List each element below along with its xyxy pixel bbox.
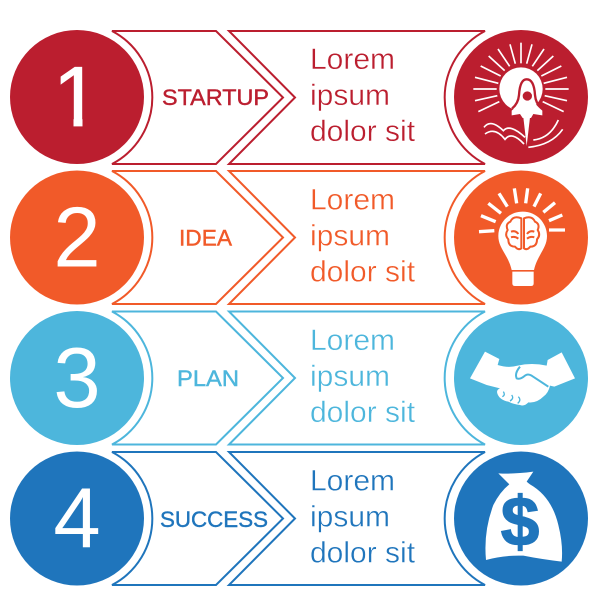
label: success: SUCCESS (160, 507, 268, 532)
number circle 1: 1 (53, 50, 100, 145)
number circle 3 (10, 311, 144, 445)
arrow: text panel 3 (229, 312, 485, 444)
arrow: label chevron 4 (112, 452, 283, 585)
arrow: text panel 2 (229, 171, 485, 304)
icon: rocket (473, 43, 569, 147)
icon circle 2 (454, 170, 588, 304)
icon circle 4 (454, 452, 588, 586)
text block 2: Lorem (310, 184, 395, 216)
arrow: text panel 4 (229, 452, 485, 585)
number circle 1 (10, 30, 144, 164)
text block 2 (310, 184, 416, 288)
row 4: success (10, 452, 588, 586)
text block 1: ipsum (310, 79, 390, 112)
label: plan: PLAN (177, 366, 239, 391)
number circle 3: 3 (53, 331, 101, 426)
label: startup: STARTUP (162, 85, 269, 110)
label: idea: IDEA (179, 226, 232, 250)
icon circle 3 (454, 311, 588, 445)
number circle 2: 2 (53, 190, 101, 286)
text block 3: Lorem (310, 324, 395, 357)
arrow: label chevron 3 (112, 312, 283, 444)
text block 4 (310, 464, 416, 570)
number circle 2 (10, 170, 144, 304)
row 3: plan (10, 311, 588, 445)
arrow: text panel 1 (229, 31, 485, 164)
text block 2: dolor sit (310, 256, 416, 288)
text block 4: Lorem (310, 464, 395, 498)
row 2: idea (10, 170, 588, 304)
text block 2: ipsum (310, 220, 390, 252)
text block 4: ipsum (310, 500, 390, 534)
text block 3: ipsum (310, 360, 390, 393)
text block 1: dolor sit (310, 115, 416, 148)
text block 4: dolor sit (310, 536, 416, 570)
icon circle 1 (454, 30, 588, 164)
number circle 4 (10, 452, 144, 586)
number circle 4: 4 (53, 472, 101, 566)
arrow: label chevron 2 (112, 171, 283, 304)
icon: money bag (485, 472, 562, 562)
text block 1: Lorem (310, 43, 395, 76)
icon: light bulb with brain (479, 188, 565, 286)
row 1: startup (10, 30, 588, 164)
icon: money bag: $ (501, 482, 539, 560)
icon: handshake (470, 352, 575, 405)
text block 3: dolor sit (310, 396, 416, 429)
text block 1 (310, 43, 416, 148)
arrow: label chevron 1 (112, 31, 283, 164)
text block 3 (310, 324, 416, 429)
